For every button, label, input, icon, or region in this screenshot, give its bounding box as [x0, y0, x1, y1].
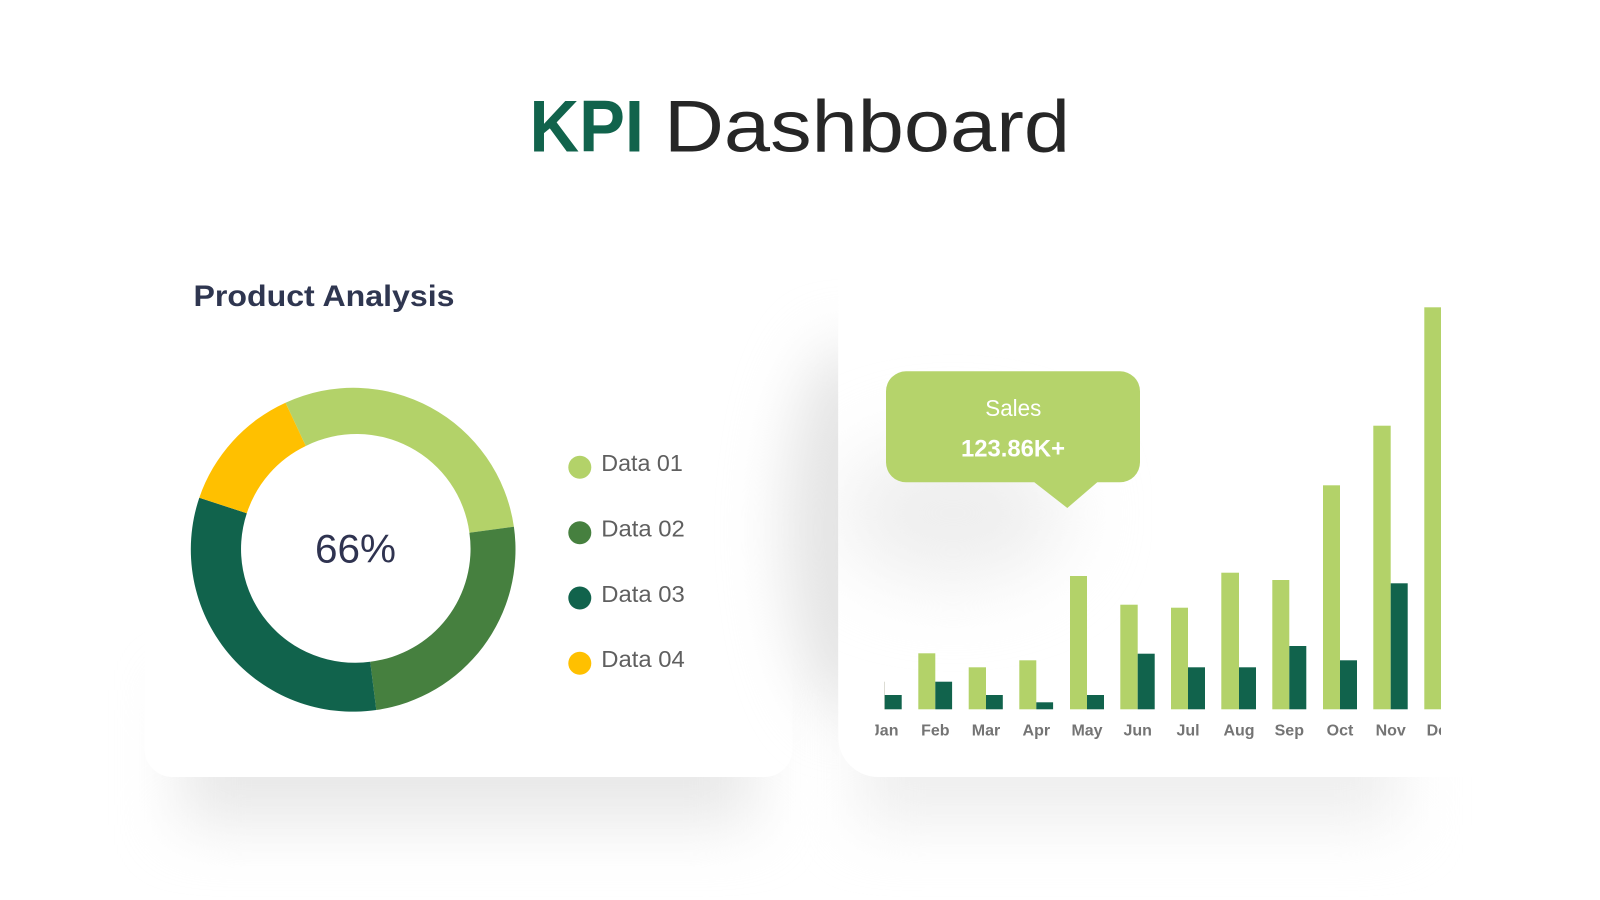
legend item: data 02: Data 02	[601, 516, 685, 542]
segment: data 04	[199, 403, 306, 513]
month axis labels: May	[1071, 723, 1103, 740]
left card	[144, 375, 792, 777]
shadow: under left card	[180, 690, 755, 825]
bars: jan	[884, 682, 902, 709]
bars: jun	[1120, 605, 1155, 709]
right card	[838, 240, 1518, 777]
bars: may	[1070, 576, 1104, 709]
month axis labels: Jun	[1123, 723, 1152, 740]
panel: product analysis	[144, 280, 792, 777]
bars: apr	[1019, 660, 1053, 709]
legend item: data 04: Data 04	[601, 646, 685, 672]
month axis labels: Nov	[1376, 723, 1406, 740]
shadow: under right card	[860, 690, 1400, 825]
legend item: data 02	[568, 516, 685, 544]
donut chart	[191, 388, 516, 712]
month axis labels: Aug	[1223, 723, 1255, 740]
legend item: data 01: Data 01	[601, 450, 683, 476]
shadow: between cards	[771, 346, 838, 714]
title	[530, 87, 1070, 168]
bars: sep	[1272, 580, 1306, 709]
legend item: data 03	[568, 581, 685, 610]
legend	[568, 450, 685, 675]
legend item: data 03: Data 03	[601, 581, 685, 607]
legend item: data 01	[568, 450, 683, 479]
legend item: data 04	[568, 646, 685, 675]
bars: feb	[918, 653, 952, 709]
bars: oct	[1323, 485, 1357, 709]
panel: sales bar chart	[852, 307, 1441, 777]
callout value: 123.86K+	[961, 436, 1065, 463]
segment: data 01	[286, 388, 514, 533]
segment: data 03	[191, 498, 376, 712]
month axis labels: Jan	[871, 723, 898, 740]
bar chart	[871, 307, 1456, 740]
month axis labels: Oct	[1327, 723, 1354, 740]
month axis labels	[875, 724, 1441, 739]
segment: data 02	[370, 527, 516, 710]
month axis labels: Jul	[1176, 723, 1200, 740]
bars: dec	[1424, 307, 1441, 709]
callout label: Sales	[985, 395, 1041, 421]
donut center value: 66%	[315, 528, 396, 572]
bars: aug	[1221, 573, 1256, 709]
callout bubble	[886, 371, 1140, 508]
heading: product analysis: Product Analysis	[194, 280, 454, 313]
month axis labels: Feb	[921, 723, 950, 740]
month axis labels: Dec	[1427, 723, 1456, 740]
shadow: behind callout	[852, 460, 1054, 582]
month axis labels: Sep	[1275, 723, 1304, 740]
bars: nov	[1373, 426, 1408, 709]
callout: sales	[886, 371, 1140, 508]
bars: jul	[1171, 608, 1205, 709]
bars: mar	[969, 667, 1003, 709]
title: KPI	[530, 87, 644, 168]
title: Dashboard	[664, 87, 1070, 168]
month axis labels: Apr	[1023, 723, 1050, 740]
month axis labels: Mar	[972, 723, 1000, 740]
